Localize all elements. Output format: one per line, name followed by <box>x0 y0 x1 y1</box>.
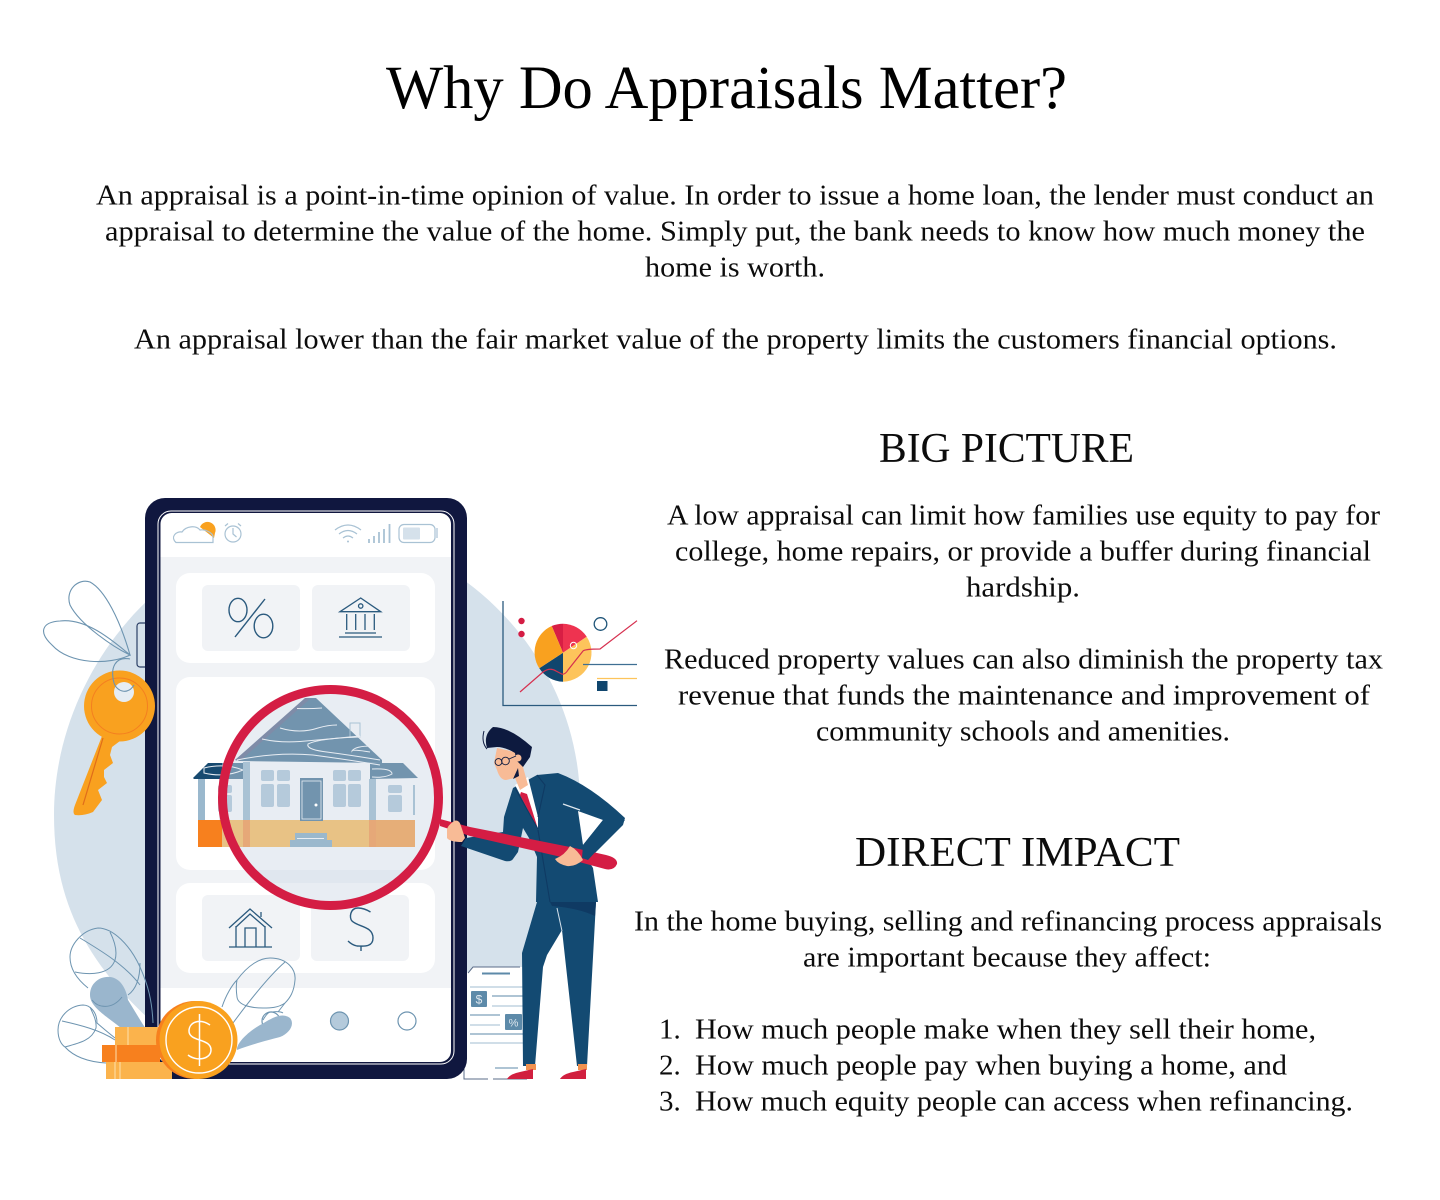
key <box>74 670 155 815</box>
illustration <box>44 498 637 1079</box>
intro text block: appraisal to determine the value of the home. Simply put, the bank needs to know how much money the <box>105 216 1365 248</box>
intro text block: An appraisal is a point-in-time opinion of value. In order to issue a home loan, the lender must conduct an <box>96 180 1375 212</box>
phone side button <box>137 623 149 667</box>
big picture text block: revenue that funds the maintenance and improvement of <box>678 680 1370 712</box>
phone body <box>145 498 467 1079</box>
document: $ <box>476 992 483 1006</box>
intro text block: An appraisal lower than the fair market value of the property limits the customers financial options. <box>134 324 1337 356</box>
forearm over handle <box>582 820 625 860</box>
direct impact text block: 2. <box>659 1050 681 1082</box>
heading: direct impact: DIRECT IMPACT <box>855 830 1180 876</box>
icon: percent <box>229 598 273 638</box>
big picture text block: A low appraisal can limit how families use equity to pay for <box>667 500 1380 532</box>
screen navigation dots <box>262 1012 416 1030</box>
jacket <box>461 773 625 902</box>
plants right <box>222 958 295 1050</box>
phone screen <box>158 511 454 1064</box>
trousers <box>522 902 596 1066</box>
heading: big picture: BIG PICTURE <box>879 426 1134 472</box>
magnifier handle <box>440 819 617 869</box>
direct impact text block <box>634 906 1382 1118</box>
status bar icons <box>174 522 437 543</box>
decorative flower loops <box>44 581 134 691</box>
direct impact text block: In the home buying, selling and refinancing process appraisals <box>634 906 1382 938</box>
background blob <box>54 530 580 1020</box>
direct impact text block: How much equity people can access when refinancing. <box>695 1086 1353 1118</box>
big picture text block <box>664 500 1384 748</box>
coin stack <box>102 1027 172 1079</box>
head <box>494 748 528 790</box>
direct impact text block: are important because they affect: <box>803 942 1211 974</box>
document <box>464 967 532 1079</box>
shoes <box>507 1064 587 1079</box>
dollar coin <box>156 1001 238 1079</box>
intro text block: home is worth. <box>645 252 825 284</box>
businessman <box>440 727 625 1079</box>
direct impact text block: How much people pay when buying a home, and <box>695 1050 1288 1082</box>
direct impact text block: 1. <box>659 1014 681 1046</box>
small chart with pie <box>503 601 637 706</box>
document: % <box>509 1018 519 1030</box>
direct impact text block: 3. <box>659 1086 681 1118</box>
hands <box>447 821 465 842</box>
direct impact text block: How much people make when they sell their home, <box>695 1014 1316 1046</box>
plants left <box>58 928 153 1063</box>
big picture text block: Reduced property values can also diminish the property tax <box>664 644 1384 676</box>
big picture text block: hardship. <box>966 572 1080 604</box>
icon: house <box>229 909 272 947</box>
house <box>193 698 418 847</box>
icon: dollar <box>348 908 373 951</box>
intro text block <box>96 180 1375 356</box>
title: Why Do Appraisals Matter? <box>386 55 1067 122</box>
big picture text block: college, home repairs, or provide a buffer during financial <box>675 536 1371 568</box>
icon: bank <box>339 598 382 637</box>
big picture text block: community schools and amenities. <box>816 716 1230 748</box>
shirt and tie <box>515 777 538 829</box>
magnifier lens with house <box>193 690 439 906</box>
